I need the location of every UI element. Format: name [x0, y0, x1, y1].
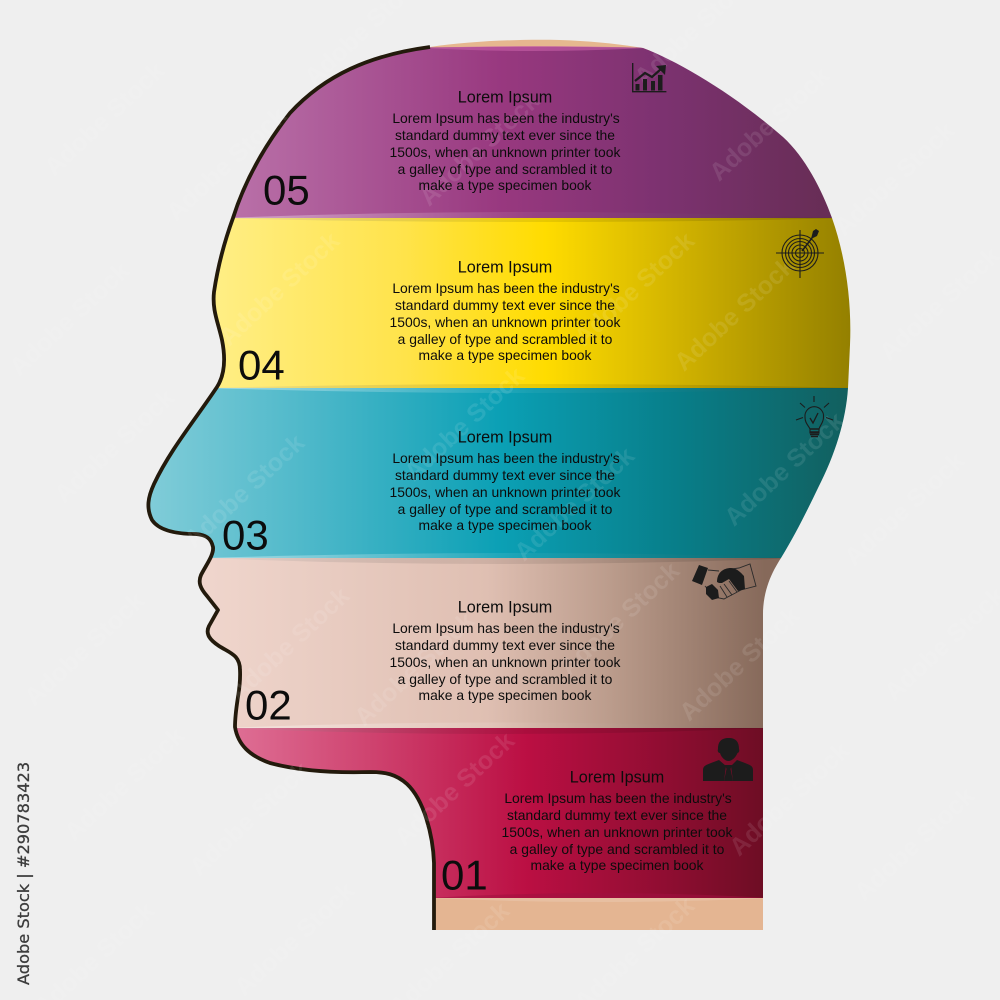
watermarks: Adobe Stock [184, 757, 315, 881]
watermarks: Adobe Stock [349, 607, 480, 731]
body 02: a galley of type and scrambled it to [398, 671, 613, 687]
heading 04: Lorem Ipsum [458, 258, 552, 276]
watermarks: Adobe Stock [161, 102, 292, 226]
body 02: standard dummy text ever since the [395, 637, 615, 653]
body 02: Lorem Ipsum has been the industry's [392, 620, 620, 636]
body 03: Lorem Ipsum has been the industry's [392, 450, 620, 466]
watermarks: Adobe Stock [669, 252, 800, 376]
body 01: standard dummy text ever since the [507, 807, 727, 823]
icon: target with dart [776, 229, 824, 278]
body 02: make a type specimen book [419, 687, 592, 703]
watermarks: Adobe Stock [49, 384, 180, 508]
head profile outline [148, 47, 434, 930]
heading 02: Lorem Ipsum [458, 598, 552, 616]
panel: 05 purple band [220, 47, 860, 218]
stock id side label: Adobe Stock | #290783423 [14, 762, 33, 985]
body 04: Lorem Ipsum has been the industry's [392, 280, 620, 296]
icon: light bulb with check [796, 396, 833, 436]
watermarks: Adobe Stock [229, 877, 360, 1000]
watermarks: Adobe Stock [59, 722, 190, 846]
panel: peach base [430, 898, 770, 932]
watermarks: Adobe Stock [554, 557, 685, 681]
body 03: standard dummy text ever since the [395, 467, 615, 483]
heading 03: Lorem Ipsum [458, 428, 552, 446]
heading 01: Lorem Ipsum [570, 768, 664, 786]
body 03: 1500s, when an unknown printer took [390, 484, 620, 500]
number 05: 05 [263, 166, 310, 214]
watermarks: Adobe Stock [389, 727, 520, 851]
number 02: 02 [245, 682, 292, 728]
top peach cap [430, 40, 650, 51]
number 04: 04 [238, 342, 285, 388]
watermarks: Adobe Stock [19, 587, 150, 711]
body 02: 1500s, when an unknown printer took [390, 654, 620, 670]
watermarks: Adobe Stock [849, 782, 980, 906]
icon: growth chart [632, 63, 666, 92]
head infographic [140, 36, 860, 932]
body 05: make a type specimen book [419, 177, 592, 193]
body 03: a galley of type and scrambled it to [398, 501, 613, 517]
watermarks: Adobe Stock [414, 87, 545, 211]
text block: 03 [222, 428, 620, 558]
text block: 01 [441, 768, 732, 898]
watermarks: Adobe Stock [724, 737, 855, 861]
body 05: Lorem Ipsum has been the industry's [392, 110, 620, 126]
watermarks: Adobe Stock [39, 57, 170, 181]
body 01: Lorem Ipsum has been the industry's [504, 790, 732, 806]
panel: 04 yellow band [205, 218, 860, 388]
watermarks: Adobe Stock [214, 227, 345, 351]
watermarks: Adobe Stock [829, 117, 960, 241]
body 04: a galley of type and scrambled it to [398, 331, 613, 347]
body 03: make a type specimen book [419, 517, 592, 533]
text block: 02 [245, 598, 620, 728]
watermarks: Adobe Stock [674, 602, 805, 726]
watermarks: Adobe Stock [719, 407, 850, 531]
watermarks: Adobe Stock [224, 582, 355, 706]
panel: 02 tan band [190, 558, 790, 728]
number 03: 03 [222, 512, 269, 558]
panel: 01 crimson band [225, 728, 770, 898]
body 05: 1500s, when an unknown printer took [390, 144, 620, 160]
watermarks: Adobe Stock [399, 362, 530, 486]
panel: 03 teal band [140, 388, 860, 558]
body 05: a galley of type and scrambled it to [398, 161, 613, 177]
body 01: 1500s, when an unknown printer took [502, 824, 732, 840]
icon: handshake [692, 564, 756, 600]
body 04: 1500s, when an unknown printer took [390, 314, 620, 330]
heading 05: Lorem Ipsum [458, 88, 552, 106]
number 01: 01 [441, 852, 488, 898]
body 04: standard dummy text ever since the [395, 297, 615, 313]
body 01: make a type specimen book [531, 857, 704, 873]
text block: 05 [263, 88, 620, 214]
watermarks: Adobe Stock [569, 227, 700, 351]
watermarks: Adobe Stock [179, 429, 310, 553]
icon: businessman [703, 738, 753, 781]
watermarks: Adobe Stock [4, 257, 135, 381]
watermarks: Adobe Stock [839, 447, 970, 571]
watermarks: Adobe Stock [509, 442, 640, 566]
watermarks: Adobe Stock [704, 62, 835, 186]
text block: 04 [238, 258, 620, 388]
body 01: a galley of type and scrambled it to [510, 841, 725, 857]
body 05: standard dummy text ever since the [395, 127, 615, 143]
body 04: make a type specimen book [419, 347, 592, 363]
band edge highlights [205, 46, 855, 902]
